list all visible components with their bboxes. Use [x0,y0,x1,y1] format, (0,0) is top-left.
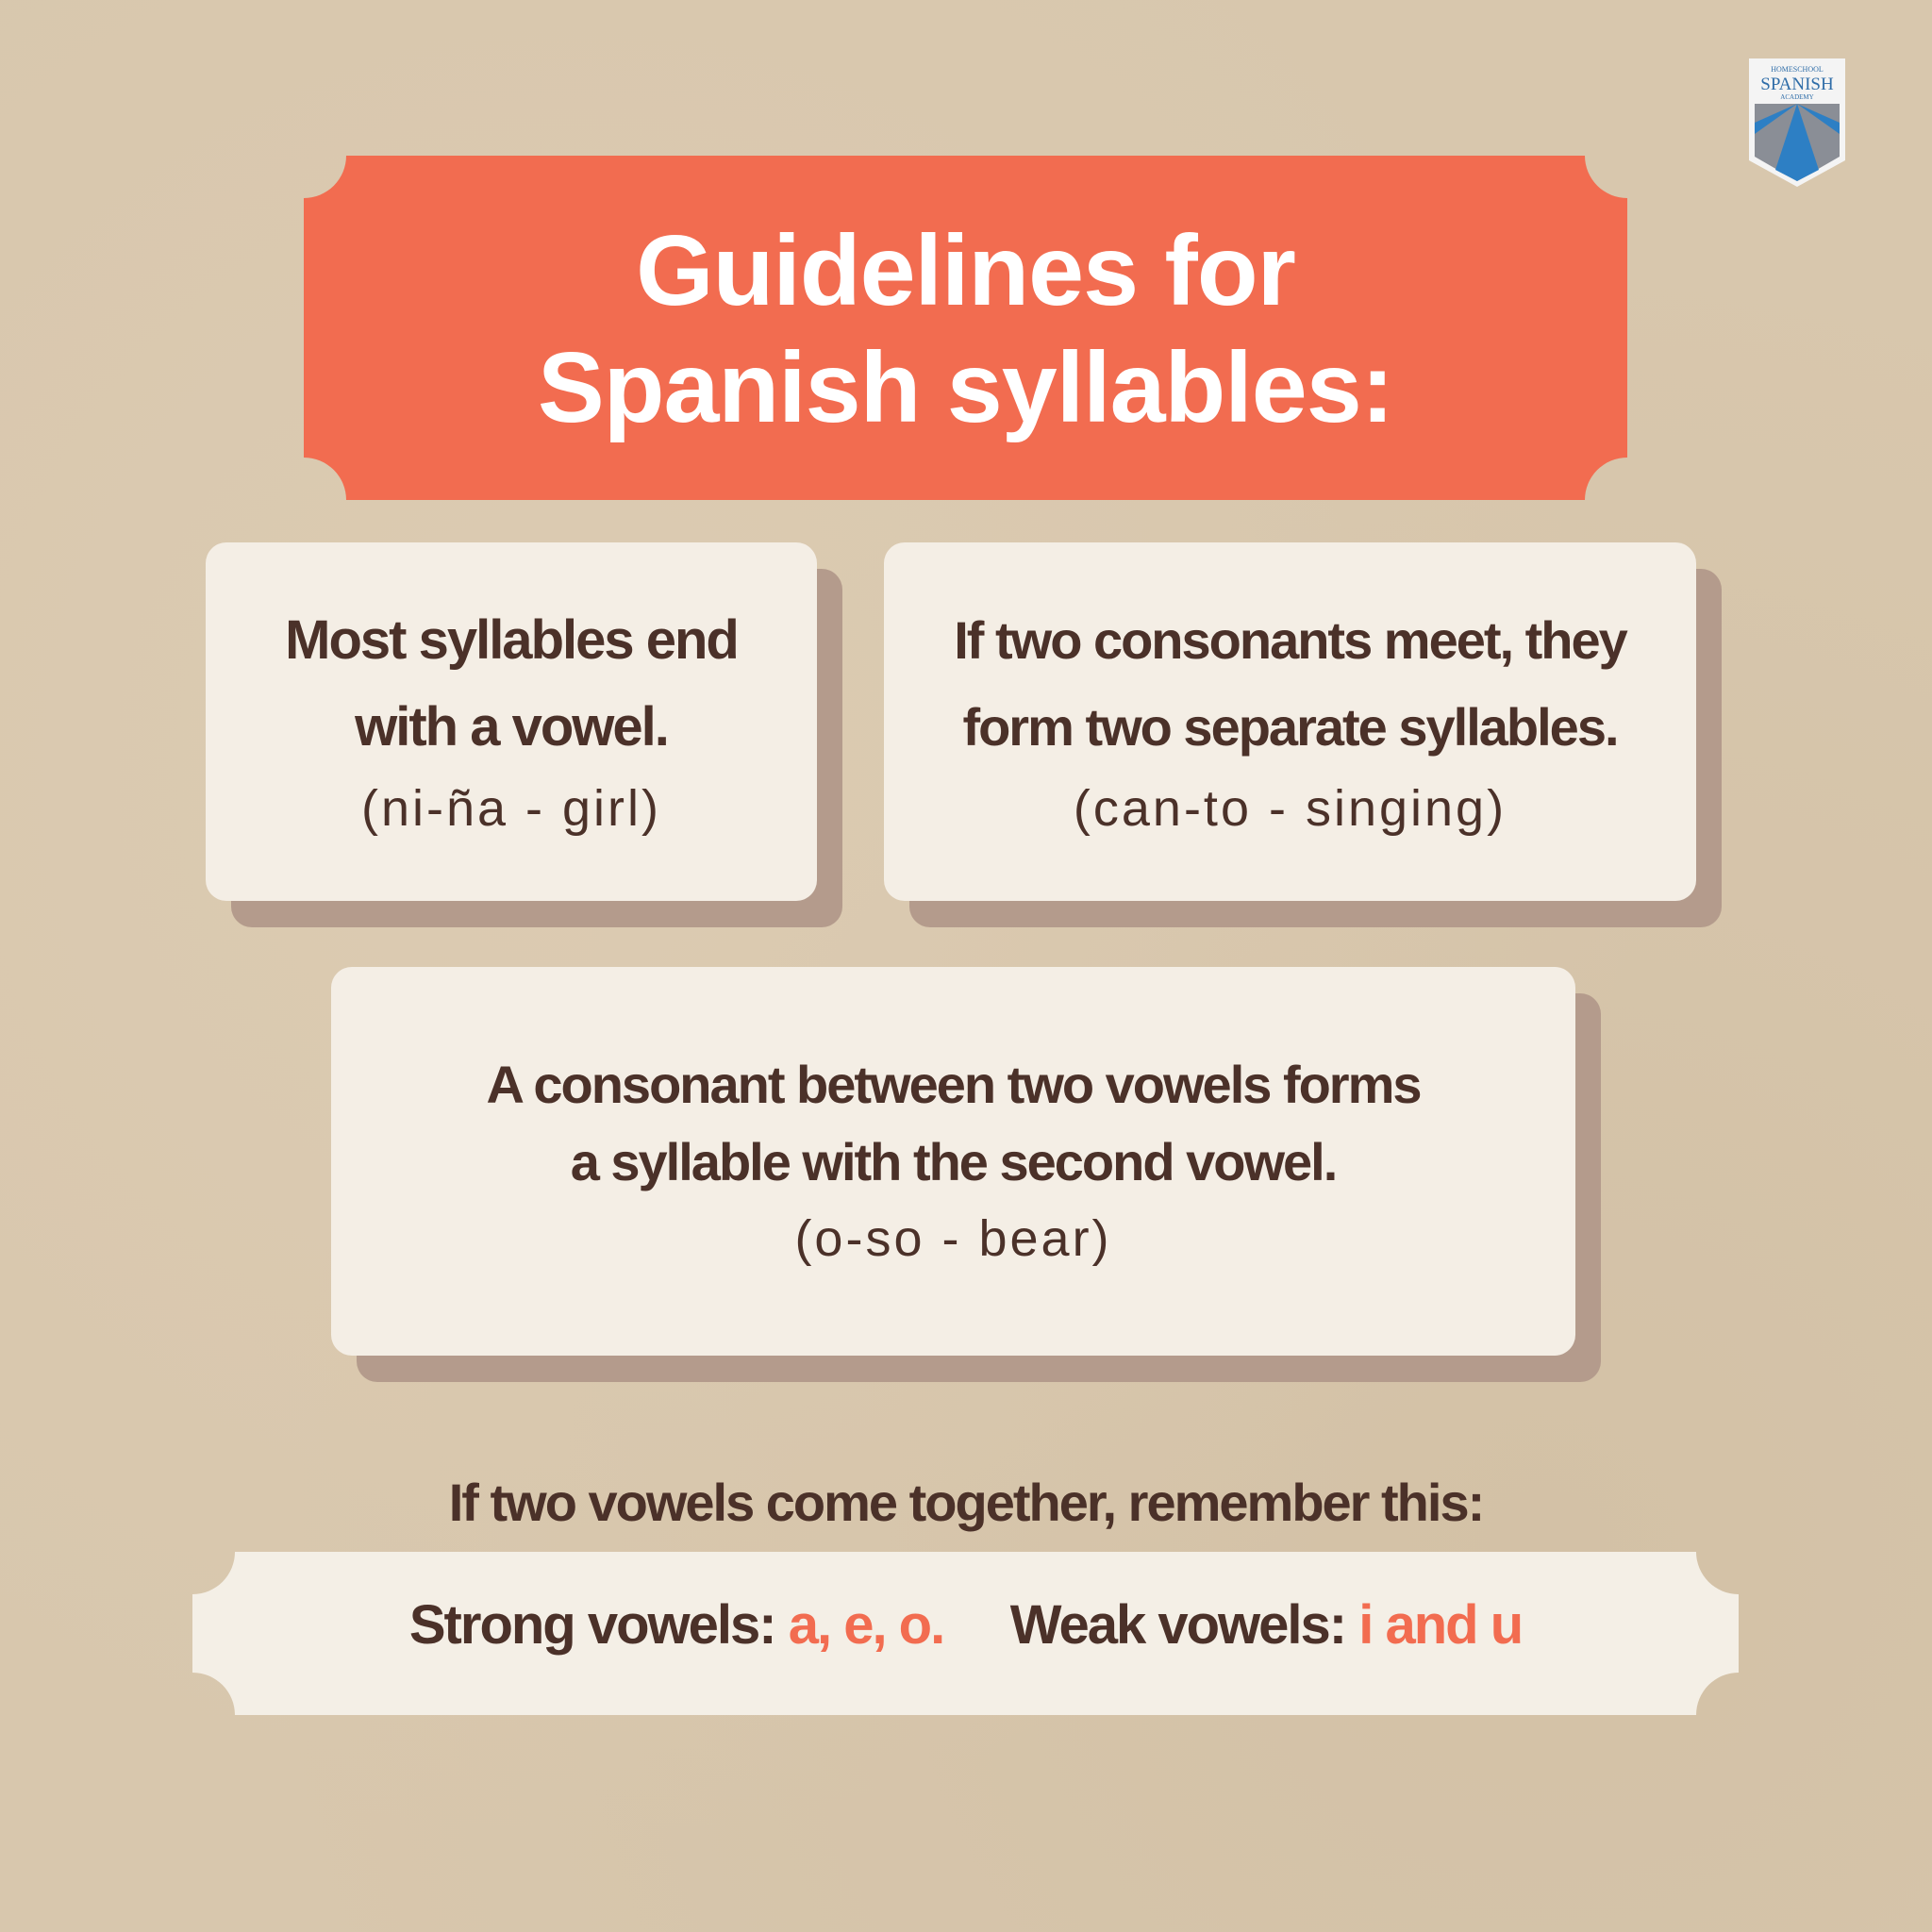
card: end with vowel: Most syllables end [285,609,738,671]
card: two consonants: form two separate syllables. [962,697,1618,757]
card: consonant between vowels: (o-so - bear) [794,1210,1112,1267]
logo: ACADEMY [1780,93,1814,101]
card: end with vowel: with a vowel. [355,696,668,758]
card: two consonants: (can-to - singing) [1074,780,1507,837]
card: end with vowel [206,542,817,901]
logo [1749,58,1845,187]
card: consonant between vowels: A consonant between two vowels forms [486,1055,1421,1114]
title text: Spanish syllables: [538,332,1393,443]
vowels banner [192,1552,1739,1715]
card: consonant between vowels: a syllable with the second vowel. [571,1132,1336,1191]
card: two consonants [884,542,1696,901]
card: consonant between vowels [331,967,1575,1356]
vowels heading: If two vowels come together, remember this: [449,1473,1483,1532]
title text: Guidelines for [636,215,1295,326]
card: end with vowel: (ni-ña - girl) [361,780,661,837]
title text [538,215,1393,443]
logo: HOMESCHOOL [1771,65,1824,74]
title banner [304,156,1627,500]
logo: SPANISH [1760,75,1834,94]
vowel text: Strong vowels: a, e, o. Weak vowels: i and u [409,1594,1522,1656]
card: two consonants: If two consonants meet, they [954,610,1626,670]
